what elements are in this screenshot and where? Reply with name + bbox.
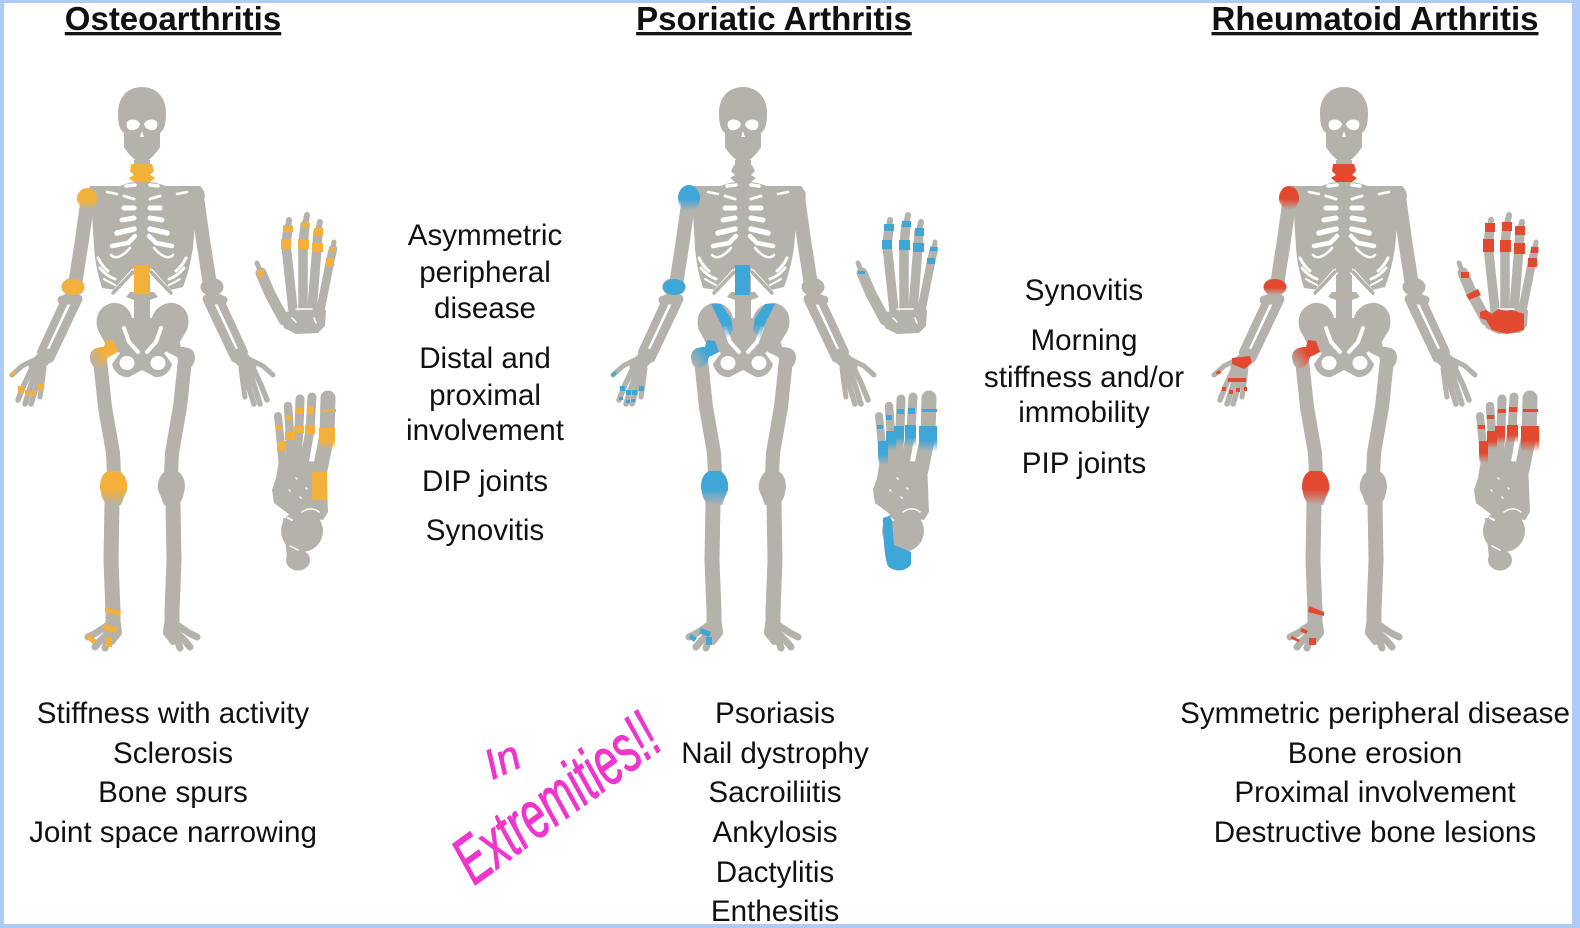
panel: psoriatic arthritis skeleton <box>611 87 937 648</box>
text block: rheumatoid features: Symmetric peripheral disease <box>1180 697 1570 730</box>
foot detail: psoriatic arthritis <box>873 397 937 570</box>
text block: shared psoriatic and rheumatoid features: immobility <box>1018 396 1150 429</box>
text block: shared osteo and psoriatic features: disease <box>434 292 536 325</box>
text block: shared osteo and psoriatic features: proximal <box>429 379 541 412</box>
text block: shared osteo and psoriatic features: involvement <box>406 414 564 447</box>
text block: psoriatic features: Ankylosis <box>712 816 838 849</box>
text block: shared osteo and psoriatic features <box>406 219 564 547</box>
text block: osteoarthritis features <box>29 697 317 849</box>
text block: psoriatic features <box>681 697 869 928</box>
text block: shared osteo and psoriatic features: Synovitis <box>426 514 544 547</box>
foot detail: osteoarthritis <box>272 397 336 570</box>
highlighted joints: osteoarthritis <box>10 164 155 647</box>
text block: shared psoriatic and rheumatoid features: Synovitis <box>1025 274 1143 307</box>
hand detail: psoriatic arthritis <box>858 215 937 334</box>
text block: osteoarthritis features: Sclerosis <box>113 737 233 770</box>
text block: shared osteo and psoriatic features: Distal and <box>419 342 551 375</box>
text block: shared psoriatic and rheumatoid features: stiffness and/or <box>984 361 1184 394</box>
text block: psoriatic features: Nail dystrophy <box>681 737 869 770</box>
text block: shared osteo and psoriatic features: DIP joints <box>422 465 548 498</box>
handwritten note: In Extremities: Extremities!! <box>438 698 674 898</box>
highlighted joints: rheumatoid arthritis <box>1216 164 1357 645</box>
handwritten note: In Extremities: In <box>477 731 528 788</box>
panel: osteoarthritis skeleton <box>10 87 336 648</box>
text block: psoriatic features: Enthesitis <box>711 895 839 928</box>
text block: psoriatic features: Dactylitis <box>716 856 834 889</box>
text block: shared psoriatic and rheumatoid features: PIP joints <box>1022 447 1146 480</box>
text block: shared psoriatic and rheumatoid features: Morning <box>1031 324 1137 357</box>
text block: psoriatic features: Sacroiliitis <box>708 776 842 809</box>
text block: shared osteo and psoriatic features: peripheral <box>419 256 551 289</box>
title: Osteoarthritis: Osteoarthritis <box>65 0 281 37</box>
text block: osteoarthritis features: Stiffness with activity <box>37 697 309 730</box>
text block: osteoarthritis features: Bone spurs <box>98 776 248 809</box>
text block: rheumatoid features: Destructive bone lesions <box>1214 816 1536 849</box>
text block: shared osteo and psoriatic features: Asymmetric <box>408 219 562 252</box>
title: Rheumatoid Arthritis: Rheumatoid Arthritis <box>1212 0 1538 37</box>
panel: rheumatoid arthritis skeleton <box>1214 87 1539 648</box>
title: Psoriatic Arthritis: Psoriatic Arthritis <box>636 0 912 37</box>
text block: rheumatoid features: Bone erosion <box>1288 737 1462 770</box>
highlighted joints: psoriatic arthritis <box>611 185 775 645</box>
foot detail: rheumatoid arthritis <box>1474 397 1539 570</box>
hand detail: rheumatoid arthritis <box>1459 215 1538 334</box>
text block: psoriatic features: Psoriasis <box>715 697 835 730</box>
text block: rheumatoid features <box>1180 697 1570 849</box>
hand detail: osteoarthritis <box>257 215 336 334</box>
text block: osteoarthritis features: Joint space narrowing <box>29 816 317 849</box>
text block: shared psoriatic and rheumatoid features <box>984 274 1184 480</box>
text block: rheumatoid features: Proximal involvement <box>1234 776 1516 809</box>
